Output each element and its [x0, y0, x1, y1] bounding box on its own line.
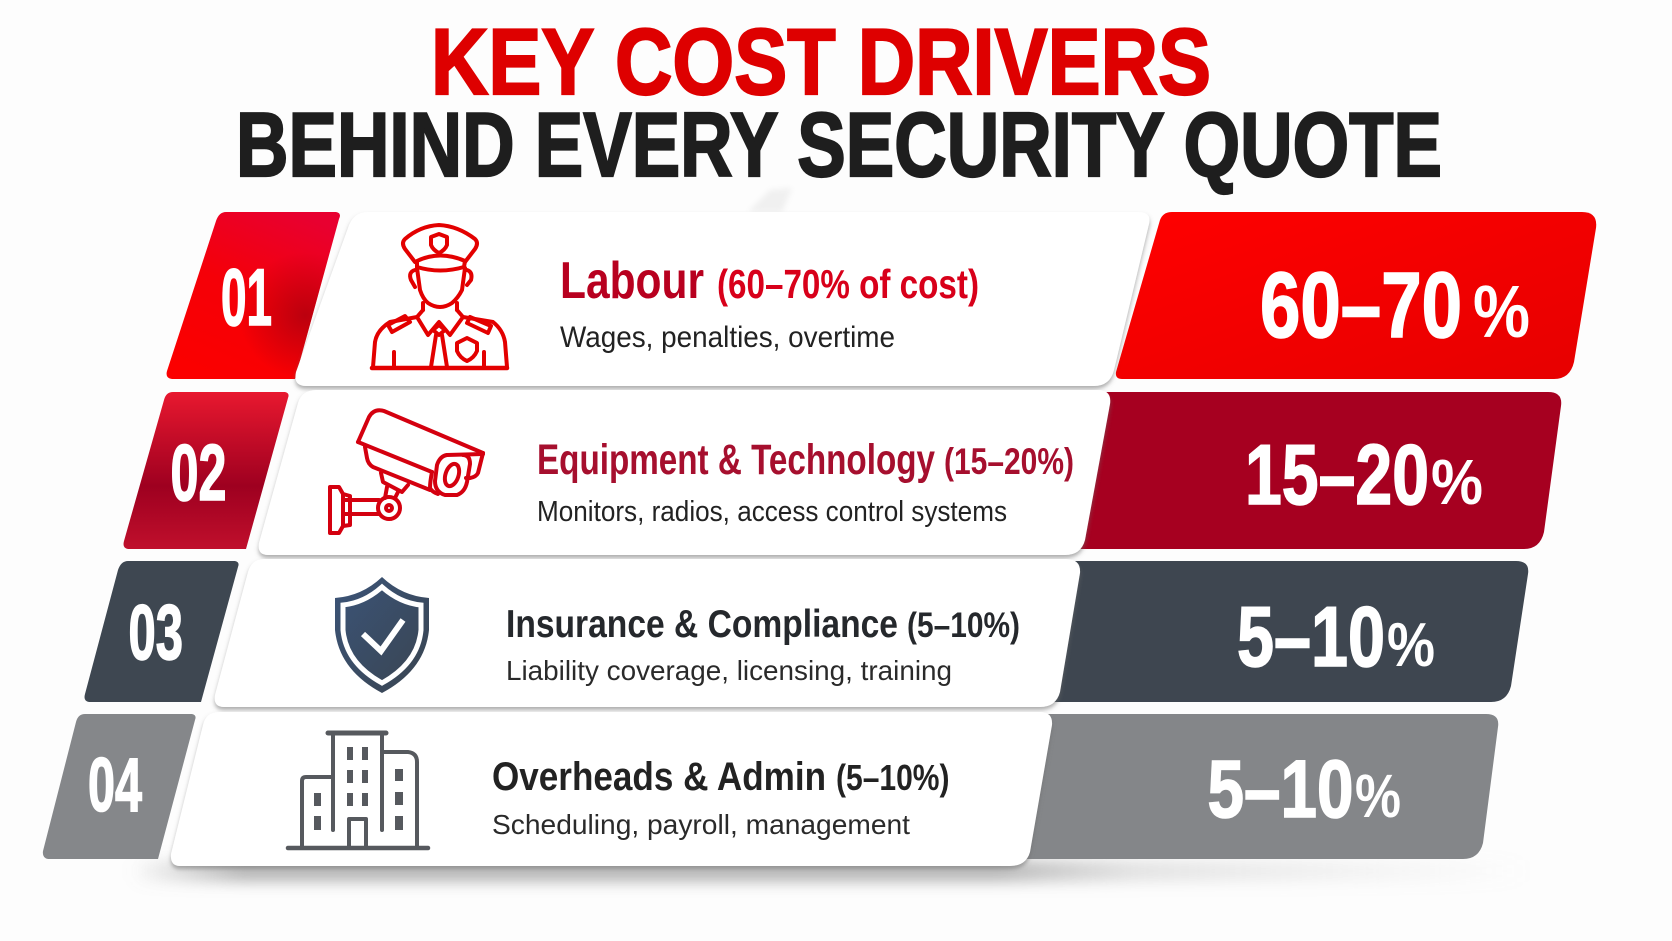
- description 3: Liability coverage, licensing, training: [506, 655, 952, 686]
- number tag 02: 02: [170, 428, 226, 517]
- description 4: Scheduling, payroll, management: [492, 809, 910, 840]
- value bar 4: 5–10: [1208, 744, 1354, 835]
- number tag 01: [167, 212, 340, 379]
- value bar 3: 5–10: [1237, 590, 1385, 685]
- card 4: [171, 712, 1052, 866]
- value bar 1: %: [1473, 270, 1530, 353]
- value bar 4: %: [1355, 762, 1401, 830]
- icon: shield: [335, 577, 429, 693]
- value bar 2: [1075, 392, 1561, 549]
- row 1: labour: [167, 212, 1596, 386]
- value bar 2: %: [1431, 446, 1483, 518]
- card 2: [259, 390, 1110, 555]
- value bar 4: [1012, 714, 1498, 859]
- ground shadow: [130, 860, 1530, 882]
- card 3: [215, 559, 1080, 707]
- card 1: (60–70% of cost): [717, 261, 979, 307]
- heading 2: Equipment & Technology: [537, 436, 935, 484]
- number tag 04: 04: [88, 743, 142, 828]
- heading 3: Insurance & Compliance: [506, 603, 898, 646]
- value bar 3: [1040, 561, 1528, 702]
- heading 4: Overheads & Admin: [492, 755, 826, 799]
- number tag 02: [124, 392, 289, 549]
- number tag 03: [84, 561, 239, 702]
- card 3: (5–10%): [907, 606, 1020, 645]
- row 4: overheads: [43, 712, 1498, 866]
- row 3: insurance: [84, 559, 1528, 707]
- value bar 1: [1116, 212, 1596, 379]
- heading 1: Labour: [560, 252, 704, 310]
- number tag 04: [43, 714, 196, 859]
- icon: security camera: [330, 410, 483, 533]
- title line 1: KEY COST DRIVERS: [431, 9, 1211, 114]
- description 1: Wages, penalties, overtime: [560, 321, 895, 354]
- icon: office building: [288, 733, 428, 848]
- value bar 3: %: [1387, 611, 1435, 680]
- number tag 03: 03: [128, 588, 183, 676]
- card 1: [295, 212, 1150, 386]
- card 2: (15–20%): [944, 441, 1074, 482]
- icon: security officer: [372, 225, 507, 368]
- number tag 01: 01: [221, 253, 272, 343]
- card 4: (5–10%): [836, 757, 950, 798]
- title: [236, 9, 1442, 196]
- value bar 1: 60–70: [1260, 253, 1462, 357]
- description 2: Monitors, radios, access control systems: [537, 496, 1007, 528]
- row 2: equipment: [124, 390, 1561, 555]
- value bar 2: 15–20: [1245, 428, 1429, 523]
